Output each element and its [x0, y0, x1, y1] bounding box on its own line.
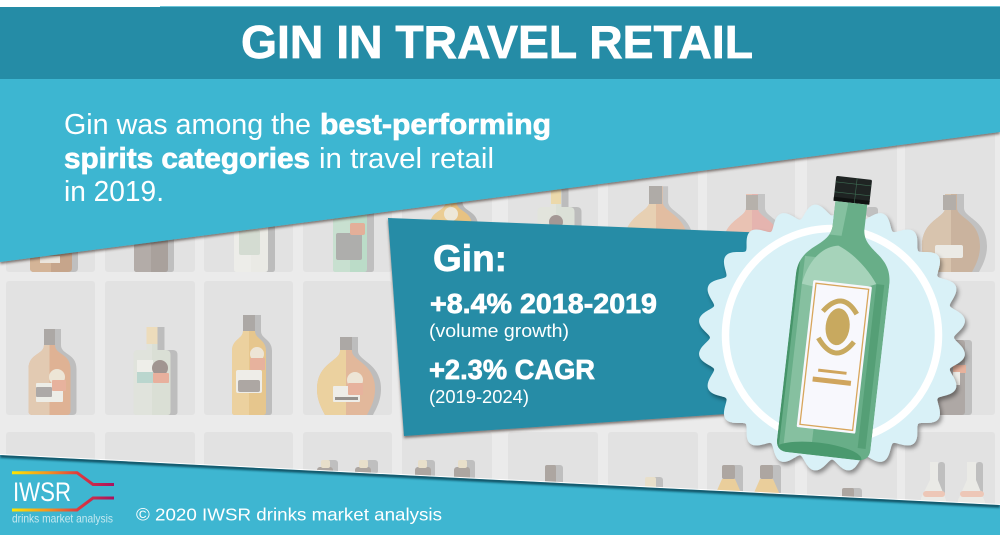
stat: CAGR: (2019-2024): [429, 387, 529, 407]
intro text: in 2019.: [64, 176, 164, 208]
bottle: round: [317, 337, 381, 415]
intro text: in travel retail: [319, 143, 494, 175]
stat: CAGR: [429, 354, 595, 407]
logo: IWSR: [12, 473, 114, 526]
logo: IWSR: IWSR: [13, 477, 71, 507]
rosette badge: [697, 203, 967, 472]
bottle: behind rosette: [925, 340, 972, 415]
bottle: flask: [28, 329, 76, 415]
icon: gin bottle: [777, 176, 890, 460]
bottle label: [797, 280, 872, 434]
stat: CAGR: +2.3% CAGR: [429, 354, 595, 385]
copyright: © 2020 IWSR drinks market analysis: [136, 504, 442, 524]
middle row bottles: [28, 315, 972, 415]
panel: intro band: [0, 79, 1000, 262]
intro text: best-performing: [320, 109, 551, 141]
bottle: tall: [232, 315, 272, 415]
stat: volume growth: [429, 288, 657, 341]
bottle body: [777, 201, 890, 460]
intro text: Gin was among the: [64, 109, 311, 141]
stat: volume growth: +8.4% 2018-2019: [430, 288, 657, 319]
logo: IWSR: drinks market analysis: [12, 512, 113, 526]
top row bottles: [30, 186, 987, 272]
stat heading: Gin:: [433, 238, 507, 279]
stat: volume growth: (volume growth): [429, 321, 569, 341]
shelving background: [0, 100, 1000, 522]
panel: gin statistics: [388, 218, 770, 436]
bottom row bottles: [317, 460, 985, 510]
bottle cap: [833, 176, 872, 205]
title: GIN IN TRAVEL RETAIL: [241, 16, 753, 68]
footer band: [0, 454, 1000, 535]
intro text: spirits categories: [64, 143, 310, 175]
bottle: square: [134, 327, 178, 415]
title band: [0, 6, 1000, 79]
intro text: [64, 109, 551, 208]
